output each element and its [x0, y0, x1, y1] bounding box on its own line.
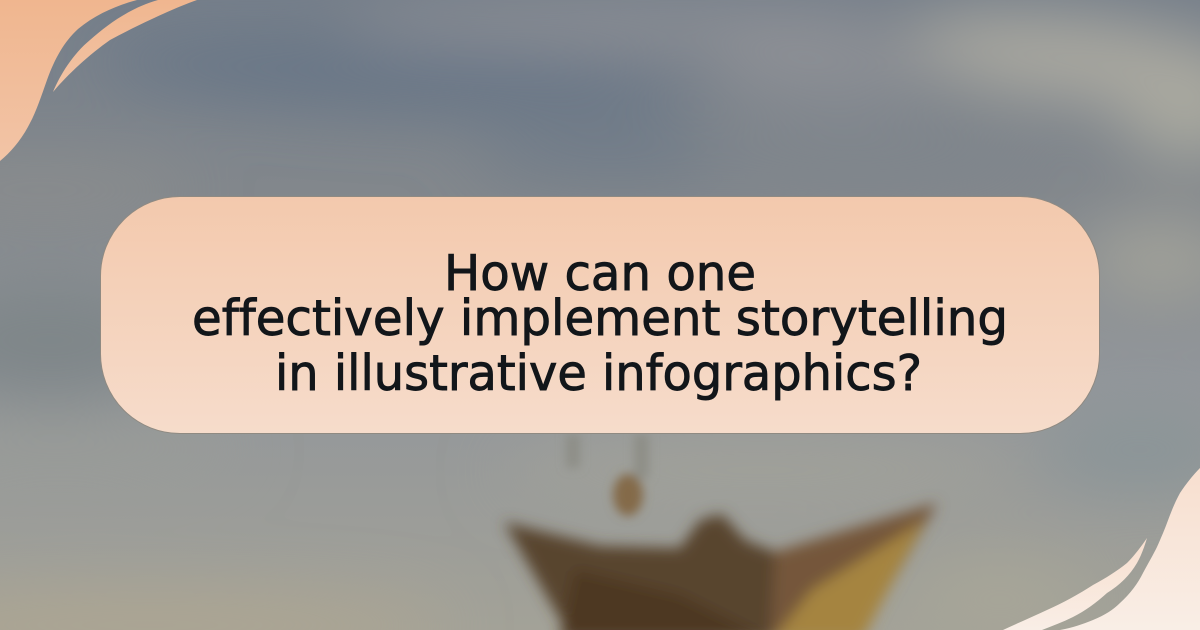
balloon and strings [566, 434, 649, 516]
heading: in illustrative infographics? [275, 345, 922, 402]
title card [100, 196, 1100, 434]
paper boat [504, 503, 937, 630]
heading: effectively implement storytelling [192, 290, 1008, 347]
heading: How can one [444, 245, 756, 302]
